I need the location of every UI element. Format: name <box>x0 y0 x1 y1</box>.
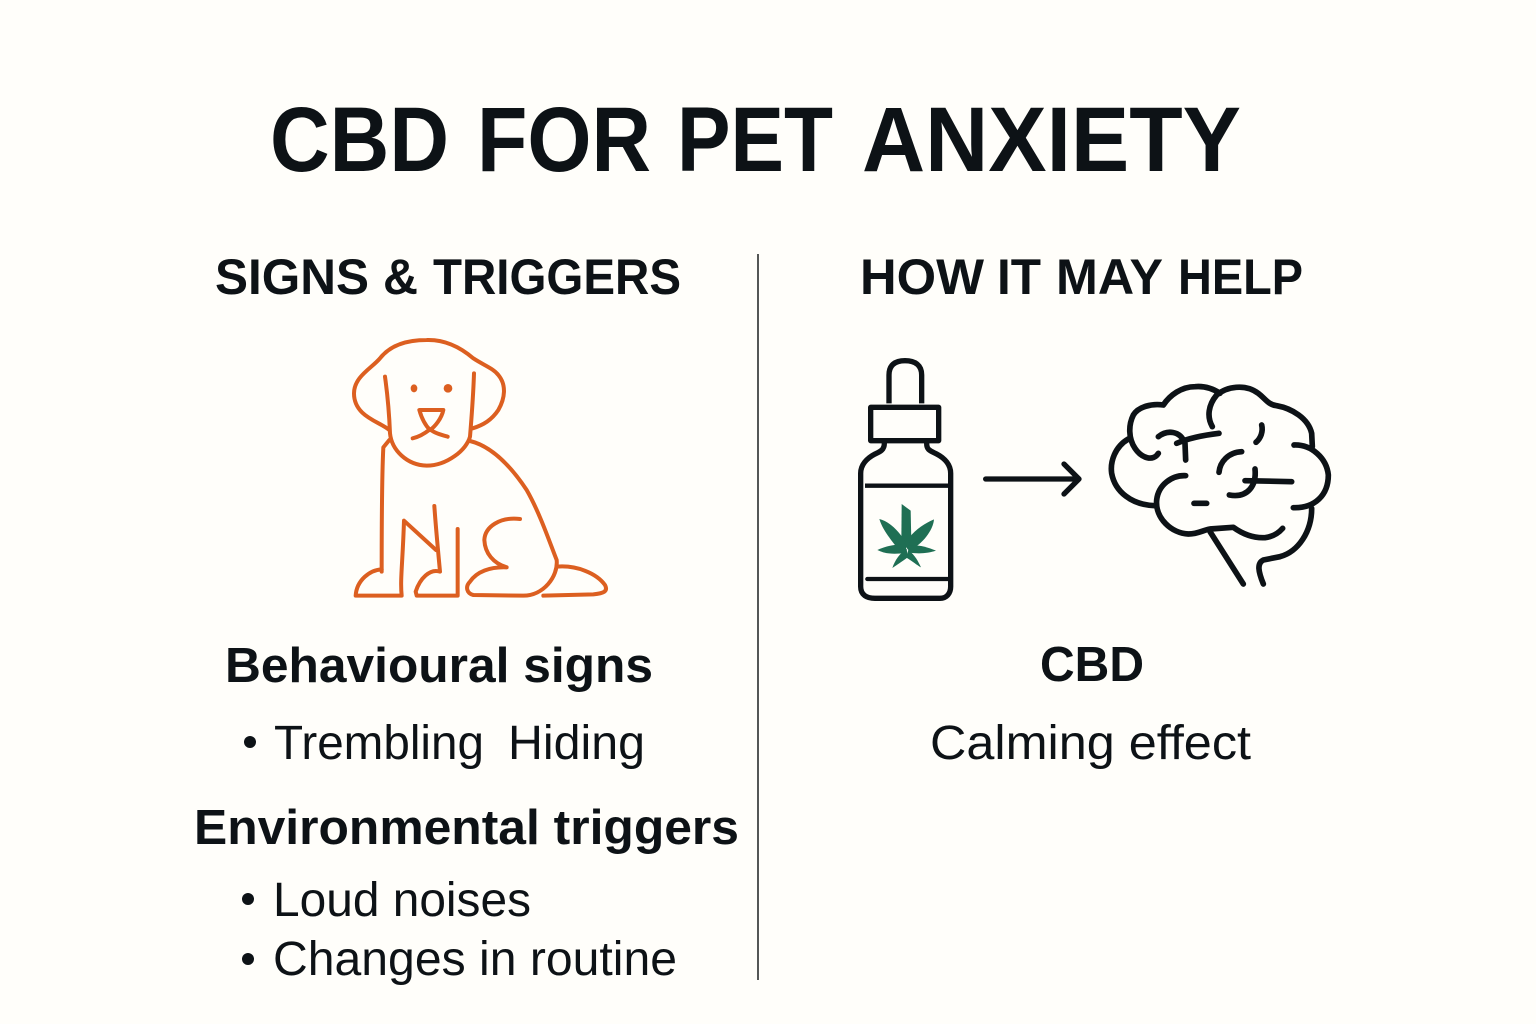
list: behavioural signs items <box>244 717 645 770</box>
title: CBD <box>270 89 449 191</box>
icon: sitting dog <box>354 340 606 596</box>
heading: how it may help: HELP <box>1178 249 1303 305</box>
heading: how it may help: MAY <box>1056 249 1163 305</box>
heading: signs and triggers: & <box>383 249 418 305</box>
title <box>270 89 1241 191</box>
label: CBD: CBD <box>1040 638 1144 692</box>
title: FOR <box>477 89 651 191</box>
list: environmental triggers items: Loud noises <box>273 874 531 927</box>
arrow: bottle to brain <box>986 464 1079 494</box>
subheading: environmental triggers: Environmental triggers <box>194 801 739 855</box>
heading: signs and triggers: TRIGGERS <box>433 249 681 305</box>
list: behavioural signs items: Trembling <box>274 717 484 770</box>
list: environmental triggers items <box>242 874 677 986</box>
heading: how it may help <box>860 249 1303 305</box>
heading: how it may help: IT <box>997 249 1041 305</box>
heading: how it may help: HOW <box>860 249 985 305</box>
subheading: behavioural signs: Behavioural signs <box>225 639 653 693</box>
icon: cannabis leaf <box>877 504 936 568</box>
heading: signs and triggers <box>215 249 681 305</box>
title: ANXIETY <box>862 89 1241 191</box>
label: calming effect: Calming effect <box>930 717 1251 770</box>
icon: CBD dropper bottle <box>861 361 951 598</box>
heading: signs and triggers: SIGNS <box>215 249 369 305</box>
list: behavioural signs items: Hiding <box>508 717 645 770</box>
title: PET <box>677 89 833 191</box>
divider between columns <box>757 254 759 980</box>
list: environmental triggers items: Changes in routine <box>273 933 677 986</box>
icon: brain <box>1111 387 1328 584</box>
